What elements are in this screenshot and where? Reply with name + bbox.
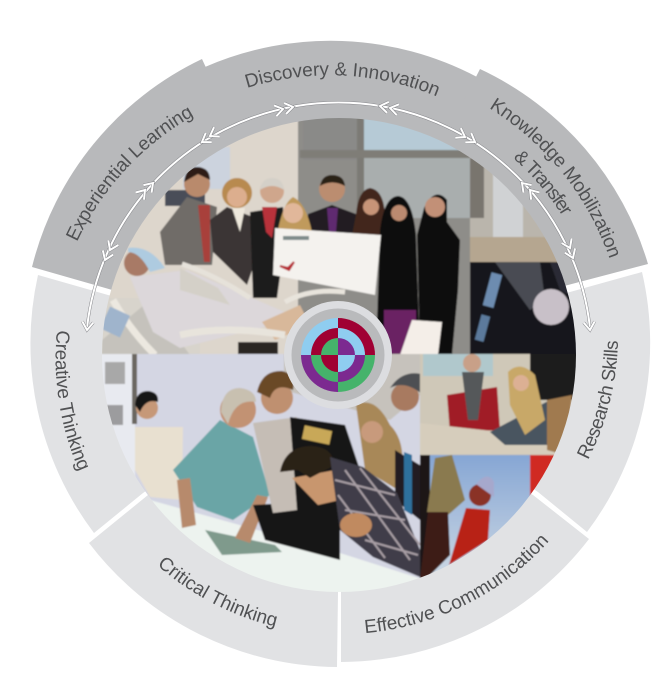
plaid shirt: [330, 457, 420, 577]
logo inner ring quadrants: [321, 338, 355, 372]
person: [210, 207, 260, 285]
segment: Experiential Learning: [32, 59, 339, 355]
label: Effective Communication: Effective Communication: [365, 536, 548, 633]
person: [277, 196, 312, 232]
segment: Knowledge Mobilization & Transfer: [339, 69, 648, 345]
hand rest: [262, 305, 310, 340]
photo: climbers against sky: [418, 454, 554, 578]
man front head: [292, 470, 340, 505]
man beanie: [391, 383, 419, 411]
man striped shirt and black tee: [253, 417, 297, 513]
segment: Effective Communication: [339, 400, 589, 662]
label: Discovery & Innovation: Discovery & Innovation: [245, 62, 439, 96]
man teal shirt: [173, 420, 270, 520]
label: Experiential Learning: Experiential Learning: [66, 108, 194, 240]
label: Creative Thinking: Creative Thinking: [55, 331, 88, 471]
woman with glasses: [356, 402, 402, 490]
logo middle ring quadrants: [311, 328, 365, 382]
patient gown: [130, 270, 287, 348]
photo: cheque presentation with hospital bed: [100, 115, 470, 358]
label: Critical Thinking: Critical Thinking: [160, 558, 277, 630]
black clothing: [253, 500, 340, 560]
person: [306, 205, 358, 236]
label: & Transfer: & Transfer: [514, 152, 571, 214]
label: Knowledge Mobilization: Knowledge Mobilization: [490, 98, 618, 258]
segment: Discovery & Innovation: [205, 41, 477, 355]
central target logo: [284, 301, 392, 409]
segment: Critical Thinking: [89, 400, 339, 667]
photo collage: [100, 115, 580, 596]
segment: Creative Thinking: [30, 275, 339, 533]
bed rails: [182, 264, 250, 298]
photo: lab equipment: [470, 150, 580, 357]
table: [150, 500, 425, 596]
photo: students around table: [100, 354, 428, 596]
bed panel: [100, 298, 200, 358]
logo outer ring quadrants: [301, 318, 375, 392]
person: [417, 195, 460, 355]
label: Research Skills: Research Skills: [576, 341, 618, 459]
cheque: [273, 228, 381, 295]
segment: Research Skills: [339, 272, 650, 532]
person: [376, 195, 420, 328]
student white shirt: [135, 427, 183, 500]
arrow arc with chevrons: [82, 101, 595, 331]
person: [160, 197, 217, 265]
person: [250, 207, 285, 298]
person: [352, 188, 388, 236]
photo: students in red coat: [420, 354, 580, 456]
